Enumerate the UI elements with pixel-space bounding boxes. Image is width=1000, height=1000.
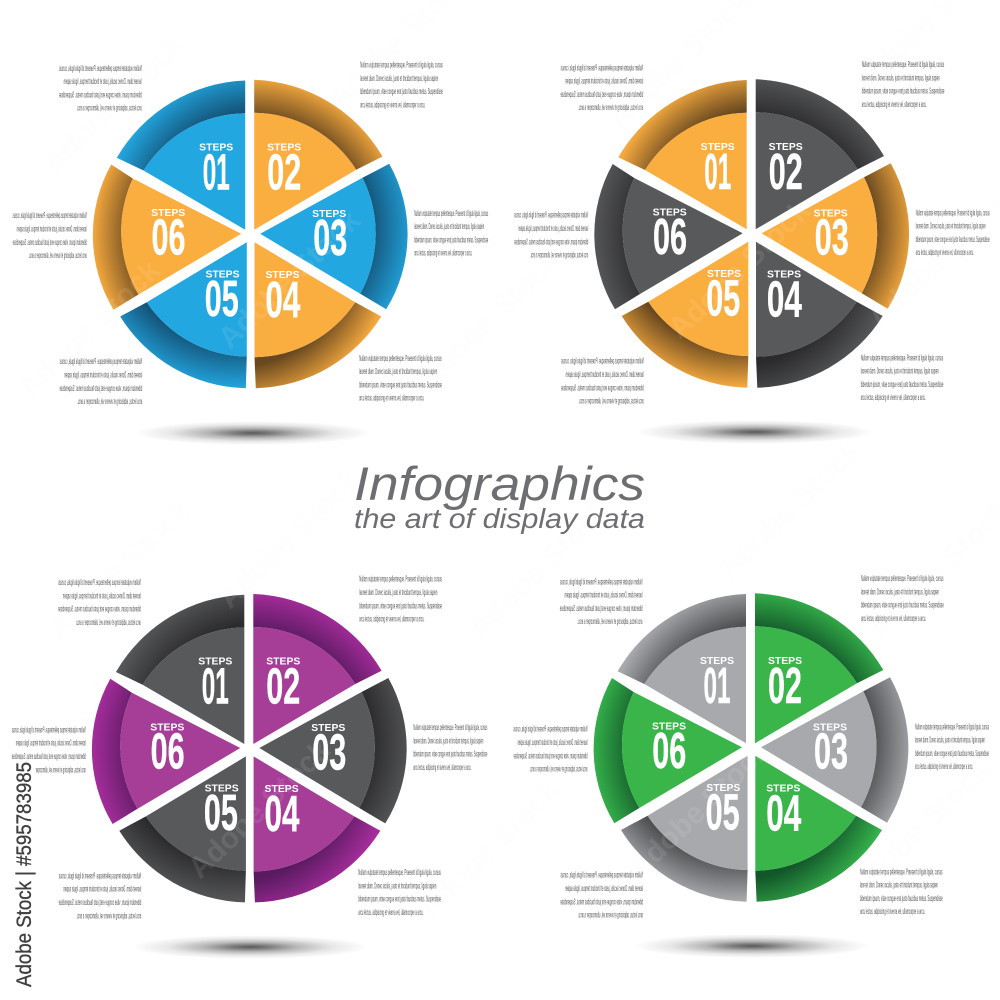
mirrored text block: bottom left [560, 870, 643, 920]
chart 4: light grey and green: arcu lectus, adipiscing et viverra vel, ullamcorper a arcu. [578, 910, 643, 920]
text: arcu lectus, adipiscing et viverra vel, ullamcorper a arcu. [414, 248, 472, 258]
segment 02: 02 [266, 658, 300, 715]
watermark: Adobe Stock [37, 29, 192, 180]
text: bibendum ipsum, vitae congue erat justo faucibus metus. Suspendisse [358, 894, 441, 904]
text: bibendum ipsum, vitae congue erat justo faucibus metus. Suspendisse [359, 379, 442, 389]
segment 05: 05 [205, 270, 239, 327]
text block: top right [359, 574, 442, 624]
segment 01: 01 [704, 657, 730, 714]
segment 03: 03 [312, 723, 346, 780]
segment 02: STEPS [768, 656, 802, 667]
watermark: Adobe Stock [42, 494, 197, 645]
chart 4: light grey and green: arcu lectus, adipiscing et viverra vel, ullamcorper a arcu. [578, 616, 642, 626]
mirrored text block: middle left [514, 210, 588, 260]
segment 02: 02 [267, 144, 301, 200]
segment 06: STEPS [151, 208, 185, 219]
chart 2: orange and dark grey: arcu lectus, adipiscing et viverra vel, ullamcorper a arcu. [578, 102, 643, 112]
segment 06: 06 [652, 722, 686, 779]
mirrored text block: middle left [13, 210, 87, 260]
watermark: Adobe Stock [212, 464, 367, 615]
segment 05 [622, 242, 748, 388]
segment 03 [762, 163, 909, 309]
text: arcu lectus, adipiscing et viverra vel, ullamcorper a arcu. [530, 250, 588, 260]
segment 04 [755, 756, 882, 902]
segment 03: 03 [814, 723, 848, 780]
text: Nullam vulputate tempus pellentesque. Praesent id ligula ligula, cursus [414, 208, 488, 218]
chart 3: dark grey and purple: arcu lectus, adipiscing et viverra vel, ullamcorper a arcu. [359, 614, 424, 624]
text: bibendum ipsum, vitae congue erat justo faucibus metus. Suspendisse [414, 234, 488, 244]
segment 02 [254, 80, 382, 230]
segment 06 [93, 164, 241, 310]
text block: middle right [915, 721, 989, 771]
segment 04: 04 [767, 270, 802, 327]
text: Nullam vulputate tempus pellentesque. Praesent id ligula ligula, cursus [561, 62, 643, 72]
text: Nullam vulputate tempus pellentesque. Praesent id ligula ligula, cursus [413, 722, 487, 732]
segment 05: STEPS [707, 269, 741, 280]
drop shadow: chart 1 [135, 421, 371, 445]
segment 04: STEPS [265, 270, 300, 281]
mirrored text block: top left [59, 63, 142, 113]
segment 03 [259, 678, 407, 823]
drop shadow: chart 3 [132, 935, 368, 959]
segment 04 [254, 756, 380, 902]
text: Nullam vulputate tempus pellentesque. Praesent id ligula ligula, cursus [359, 353, 442, 363]
watermark: Adobe Stock [12, 254, 167, 405]
text: Nullam vulputate tempus pellentesque. Praesent id ligula ligula, cursus [560, 870, 643, 880]
mirrored text block: middle left [513, 724, 588, 774]
text: Nullam vulputate tempus pellentesque. Praesent id ligula ligula, cursus [358, 867, 441, 877]
text: arcu lectus, adipiscing et viverra vel, ullamcorper a arcu. [530, 764, 588, 774]
segment 04: STEPS [766, 783, 800, 794]
text: bibendum ipsum, vitae congue erat justo faucibus metus. Suspendisse [560, 89, 643, 99]
chart 3: dark grey and purple: arcu lectus, adipiscing et viverra vel, ullamcorper a arcu. [358, 907, 423, 917]
segment 05: 05 [204, 784, 238, 841]
segment 01: STEPS [700, 656, 734, 667]
segment 04: 04 [766, 784, 802, 841]
segment 05: STEPS [706, 783, 740, 794]
text: arcu lectus, adipiscing et viverra vel, ullamcorper a arcu. [413, 762, 471, 772]
text block: top right [360, 60, 443, 109]
segment 06: STEPS [653, 208, 687, 219]
watermark: Adobe Stock [212, 204, 367, 355]
chart 4: light grey and green [513, 573, 989, 920]
chart 1: blue and orange: laoreet diam. Donec iaculis, justo et tincidunt tempus, ligula sapien [360, 73, 438, 83]
segment 06 [594, 164, 743, 309]
chart 2: orange and dark grey [514, 59, 990, 406]
text block: middle right [413, 722, 487, 772]
text: laoreet diam. Donec iaculis, justo et tincidunt tempus, ligula sapien [517, 737, 588, 747]
chart 4: light grey and green: laoreet diam. Donec iaculis, justo et tincidunt tempus, ligula sapien [564, 590, 642, 600]
chart 3: dark grey and purple: laoreet diam. Donec iaculis, justo et tincidunt tempus, ligula sapien [359, 587, 437, 597]
text: Nullam vulputate tempus pellentesque. Praesent id ligula ligula, cursus [514, 210, 588, 220]
segment 03: STEPS [813, 722, 847, 733]
chart 2: orange and dark grey: arcu lectus, adipiscing et viverra vel, ullamcorper a arcu. [579, 396, 644, 406]
segment 02 [756, 79, 884, 229]
segment 01: STEPS [198, 657, 232, 668]
segment 05: STEPS [205, 784, 239, 795]
segment 01 [117, 80, 245, 230]
chart 4: light grey and green: laoreet diam. Donec iaculis, justo et tincidunt tempus, ligula sapien [565, 883, 643, 893]
mirrored text block: top left [560, 62, 643, 112]
text: Nullam vulputate tempus pellentesque. Praesent id ligula ligula, cursus [561, 356, 644, 366]
subtitle: the art of display data [354, 503, 645, 534]
chart 1: blue and orange [13, 60, 488, 406]
chart 1: blue and orange: arcu lectus, adipiscing et viverra vel, ullamcorper a arcu. [359, 393, 424, 403]
segment 01: STEPS [199, 142, 233, 154]
segment 03: STEPS [312, 209, 346, 220]
text: laoreet diam. Donec iaculis, justo et tincidunt tempus, ligula sapien [414, 221, 484, 231]
drop shadow: chart 2 [637, 420, 873, 444]
mirrored text block: bottom left [59, 356, 142, 406]
segment 02 [253, 594, 382, 744]
text: laoreet diam. Donec iaculis, justo et tincidunt tempus, ligula sapien [413, 735, 483, 745]
watermark: Adobe Stock [712, 434, 867, 585]
watermark: Adobe Stock [412, 774, 567, 925]
title: Infographics [354, 457, 645, 510]
watermark: Adobe Stock [842, 754, 997, 905]
segment 05: 05 [706, 269, 740, 326]
text: bibendum ipsum, vitae congue erat justo faucibus metus. Suspendisse [514, 236, 588, 246]
drop shadow: chart 4 [634, 934, 870, 958]
segment 04: 04 [265, 785, 300, 842]
segment 01: 01 [203, 144, 230, 200]
watermark: Adobe Stock [622, 734, 777, 885]
segment 03 [260, 164, 408, 309]
text block: middle right [414, 208, 488, 258]
text block: top right [862, 59, 944, 109]
mirrored text block: bottom left [561, 356, 644, 406]
segment 03: 03 [313, 209, 347, 266]
segment 06: STEPS [150, 722, 184, 733]
text block: bottom right [358, 867, 441, 917]
text: bibendum ipsum, vitae congue erat justo faucibus metus. Suspendisse [561, 382, 644, 392]
watermark: Adobe Stock [182, 734, 337, 885]
segment 05: STEPS [205, 270, 240, 280]
segment 02: STEPS [267, 142, 301, 154]
mirrored text block: middle left [12, 724, 86, 774]
segment 01: 01 [202, 658, 229, 715]
text: bibendum ipsum, vitae congue erat justo faucibus metus. Suspendisse [513, 750, 588, 760]
text: bibendum ipsum, vitae congue erat justo faucibus metus. Suspendisse [560, 603, 642, 613]
segment 02 [755, 593, 883, 743]
chart 3: dark grey and purple [12, 574, 487, 920]
segment 04 [254, 242, 381, 388]
text block: bottom right [861, 352, 943, 402]
text block: middle right [916, 207, 990, 257]
segment 03: STEPS [814, 208, 848, 219]
segment 04: STEPS [265, 784, 299, 795]
watermark: Adobe Stock [462, 494, 617, 645]
chart 3: dark grey and purple: laoreet diam. Donec iaculis, justo et tincidunt tempus, ligula sapien [358, 880, 436, 890]
text block: top right [861, 573, 944, 623]
segment 06: 06 [151, 723, 185, 780]
segment 04 [756, 242, 883, 388]
text: bibendum ipsum, vitae congue erat justo faucibus metus. Suspendisse [359, 600, 442, 610]
segment 06: 06 [653, 208, 687, 265]
segment 02: 02 [768, 657, 802, 714]
segment 01: STEPS [701, 142, 735, 153]
chart 2: orange and dark grey: laoreet diam. Donec iaculis, justo et tincidunt tempus, ligula sapien [566, 369, 644, 379]
watermark: Adobe Stock [412, 244, 567, 395]
segment 02: STEPS [266, 657, 300, 668]
text: bibendum ipsum, vitae congue erat justo faucibus metus. Suspendisse [360, 86, 443, 96]
segment 03 [761, 677, 908, 823]
watermark: Adobe Stock [662, 194, 817, 345]
chart 1: blue and orange: arcu lectus, adipiscing et viverra vel, ullamcorper a arcu. [360, 99, 425, 109]
segment 01: 01 [704, 143, 731, 200]
text: Nullam vulputate tempus pellentesque. Praesent id ligula ligula, cursus [359, 574, 442, 584]
text: laoreet diam. Donec iaculis, justo et tincidunt tempus, ligula sapien [518, 223, 588, 233]
text: Nullam vulputate tempus pellentesque. Praesent id ligula ligula, cursus [514, 724, 588, 734]
segment 01 [618, 80, 747, 229]
segment 06: 06 [152, 208, 186, 266]
segment 06 [92, 679, 240, 824]
text: Nullam vulputate tempus pellentesque. Praesent id ligula ligula, cursus [560, 576, 642, 586]
segment 01 [618, 594, 746, 743]
mirrored text block: top left [560, 576, 642, 626]
stock id side label: Adobe Stock | #595783985 [13, 762, 36, 987]
segment 02: 02 [769, 143, 803, 200]
segment 06: STEPS [652, 722, 686, 733]
segment 05 [621, 756, 748, 902]
segment 02: STEPS [769, 142, 803, 153]
text: bibendum ipsum, vitae congue erat justo faucibus metus. Suspendisse [560, 896, 643, 906]
chart 2: orange and dark grey: laoreet diam. Donec iaculis, justo et tincidunt tempus, ligula sapien [565, 76, 643, 86]
text: Nullam vulputate tempus pellentesque. Praesent id ligula ligula, cursus [360, 60, 443, 70]
segment 05: 05 [706, 783, 740, 840]
mirrored text block: top left [58, 577, 141, 627]
chart 1: blue and orange: laoreet diam. Donec iaculis, justo et tincidunt tempus, ligula sapien [359, 366, 437, 376]
segment 01 [116, 595, 244, 744]
text: bibendum ipsum, vitae congue erat justo faucibus metus. Suspendisse [413, 749, 487, 759]
segment 05 [119, 756, 246, 902]
segment 04: 04 [265, 271, 301, 328]
segment 03: STEPS [311, 723, 345, 734]
text block: bottom right [860, 866, 943, 916]
segment 06 [594, 678, 742, 823]
mirrored text block: bottom left [59, 870, 141, 920]
text block: bottom right [359, 353, 442, 403]
segment 04: STEPS [767, 269, 801, 280]
segment 05 [120, 242, 247, 388]
segment 03: 03 [815, 209, 849, 266]
